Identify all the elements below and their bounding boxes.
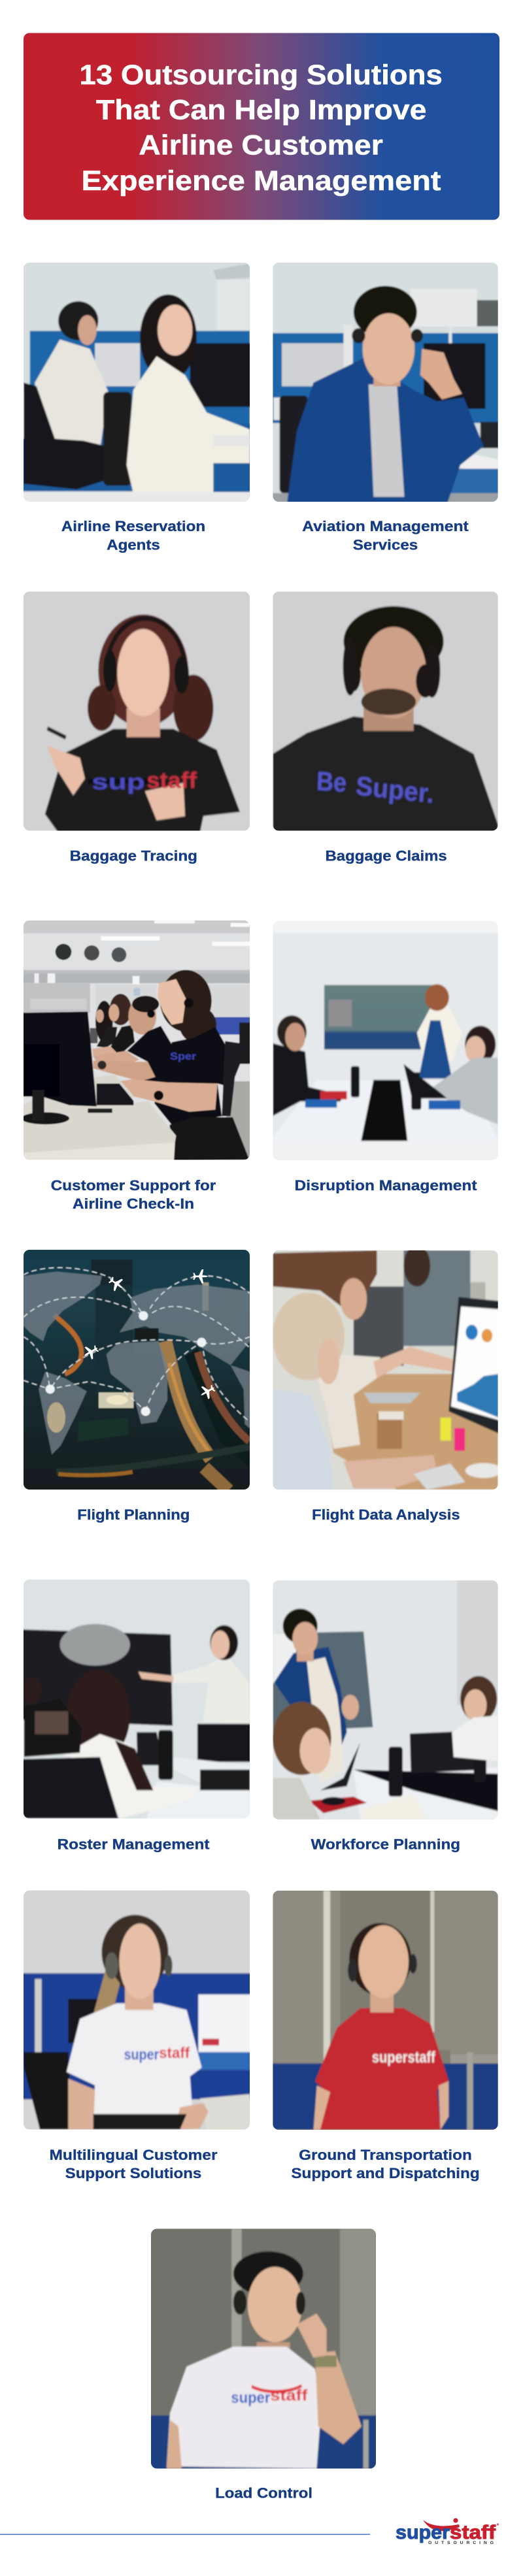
caption xyxy=(291,2147,480,2181)
caption: Workforce Planning xyxy=(311,1836,460,1852)
caption: Agents xyxy=(107,537,160,553)
caption: Roster Management xyxy=(58,1836,210,1852)
title banner: 13 Outsourcing Solutions xyxy=(79,59,443,91)
photo: row of agents in office: Sper xyxy=(170,1051,196,1062)
icon: airplanes xyxy=(81,1269,218,1401)
photo: woman with headset and black shirt xyxy=(20,587,254,837)
photo: agent in blue blazer xyxy=(269,259,503,506)
photo: agent in red branded shirt: superstaff xyxy=(372,2047,436,2066)
caption: Flight Planning xyxy=(77,1507,190,1523)
title banner: Experience Management xyxy=(81,165,441,197)
title banner: That Can Help Improve xyxy=(96,94,426,125)
panel: Ground Transportation Support and Dispatching xyxy=(269,1886,503,2181)
photo: team meeting with laptops xyxy=(269,1576,503,1826)
caption: Multilingual Customer xyxy=(50,2147,218,2163)
logo: superstaff outsourcing: super xyxy=(396,2522,450,2543)
photo: male agent adjusting headset: staff xyxy=(270,2386,309,2404)
photo: two women analysing charts xyxy=(269,1245,503,1495)
photo: meeting room with presenter xyxy=(269,917,503,1166)
caption: Disruption Management xyxy=(294,1177,477,1194)
photo: presenter pointing at screen xyxy=(20,1574,254,1823)
caption xyxy=(51,1177,216,1212)
logo: superstaff outsourcing: staff xyxy=(450,2522,496,2543)
caption: Baggage Tracing xyxy=(70,848,197,864)
photo: male agent adjusting headset: super xyxy=(231,2388,271,2407)
photo: woman with headset and black shirt: staff xyxy=(146,768,197,793)
photo: agent in white branded shirt: super xyxy=(124,2047,159,2063)
caption: Services xyxy=(353,537,418,553)
title banner: Airline Customer xyxy=(139,129,383,161)
caption: Airline Check-In xyxy=(73,1196,194,1212)
footer rule xyxy=(0,2534,370,2535)
panel: Flight Data Analysis xyxy=(269,1245,503,1523)
caption: Ground Transportation xyxy=(299,2147,472,2163)
panel: Baggage Tracing xyxy=(20,587,254,864)
caption xyxy=(61,518,205,553)
caption: Support and Dispatching xyxy=(291,2165,480,2181)
panel: Aviation Management Services xyxy=(269,259,503,553)
caption: Baggage Claims xyxy=(326,848,447,864)
panel: Roster Management xyxy=(20,1574,254,1852)
photo: woman with headset and black shirt: sup xyxy=(92,770,145,794)
title banner xyxy=(24,33,499,220)
caption xyxy=(50,2147,218,2181)
photo: man with curly hair and Be Super shirt: Be xyxy=(316,766,347,798)
photo: agent in white branded shirt xyxy=(20,1886,254,2134)
caption: Flight Data Analysis xyxy=(312,1507,460,1523)
panel: Flight Planning xyxy=(22,1248,252,1523)
caption xyxy=(302,518,469,553)
photo: agent in white branded shirt: staff xyxy=(159,2046,190,2061)
panel: Airline Reservation Agents xyxy=(20,259,254,553)
photo: reservation agents at desks xyxy=(20,259,254,506)
panel: Disruption Management xyxy=(269,917,503,1194)
panel: Workforce Planning xyxy=(269,1576,503,1852)
photo: night city with flight routes xyxy=(22,1248,252,1492)
photo: agent in red branded shirt xyxy=(269,1886,503,2134)
caption: Support Solutions xyxy=(65,2165,201,2181)
caption: Customer Support for xyxy=(51,1177,216,1194)
panel: Baggage Claims xyxy=(269,587,503,864)
panel: Multilingual Customer Support Solutions xyxy=(20,1886,254,2181)
photo: male agent adjusting headset xyxy=(148,2225,381,2473)
panel: Load Control xyxy=(148,2225,381,2502)
panel: Customer Support for Airline Check-In xyxy=(22,918,252,1212)
caption: Airline Reservation xyxy=(61,518,205,534)
logo: superstaff outsourcing: OUTSOURCING xyxy=(428,2541,494,2545)
photo: man with curly hair and Be Super shirt xyxy=(269,587,503,837)
caption: Load Control xyxy=(215,2485,312,2502)
caption: Aviation Management xyxy=(302,518,469,534)
photo: man with curly hair and Be Super shirt: Super. xyxy=(355,771,435,809)
photo: row of agents in office xyxy=(22,918,252,1162)
logo: superstaff outsourcing xyxy=(396,2518,499,2545)
